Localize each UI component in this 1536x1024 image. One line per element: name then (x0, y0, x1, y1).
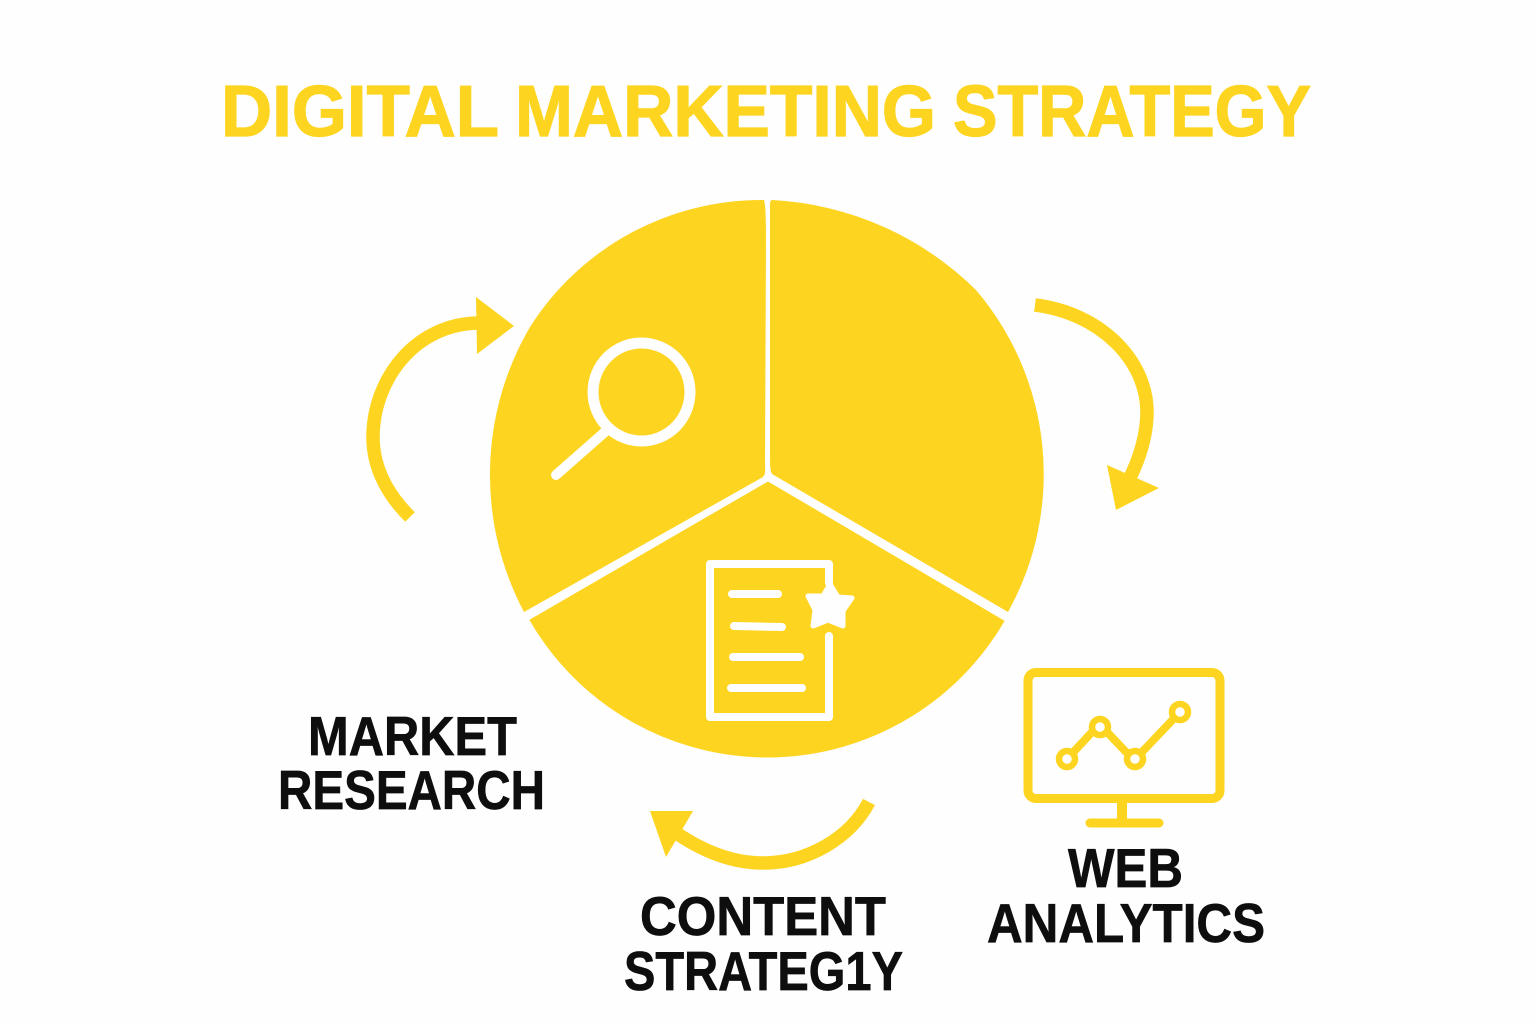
label: web analytics (987, 837, 1265, 954)
title: MARKETING (515, 72, 936, 152)
label: web analytics: WEB (1068, 837, 1183, 899)
segment: content strategy (530, 482, 1004, 757)
label: content strategy: CONTENT (640, 885, 886, 947)
arrow: bottom curved (650, 802, 869, 863)
label: content strategy (624, 885, 903, 1002)
label: market research: RESEARCH (278, 759, 545, 821)
segment: web analytics (770, 200, 1044, 612)
title: STRATEGY (953, 72, 1311, 152)
title (221, 72, 1311, 152)
title: DIGITAL (221, 72, 499, 152)
pie chart (490, 200, 1044, 757)
label: market research: MARKET (308, 705, 517, 767)
icon: magnifying glass (556, 343, 690, 475)
icon: document with star (710, 564, 852, 717)
segment: market research (490, 200, 766, 612)
arrow: right curved (1035, 305, 1159, 510)
icon: monitor with line chart (1028, 672, 1220, 823)
label: market research (278, 705, 545, 821)
label: web analytics: ANALYTICS (987, 892, 1265, 954)
arrow: left curved (373, 297, 514, 517)
label: content strategy: STRATEG1Y (624, 940, 903, 1002)
